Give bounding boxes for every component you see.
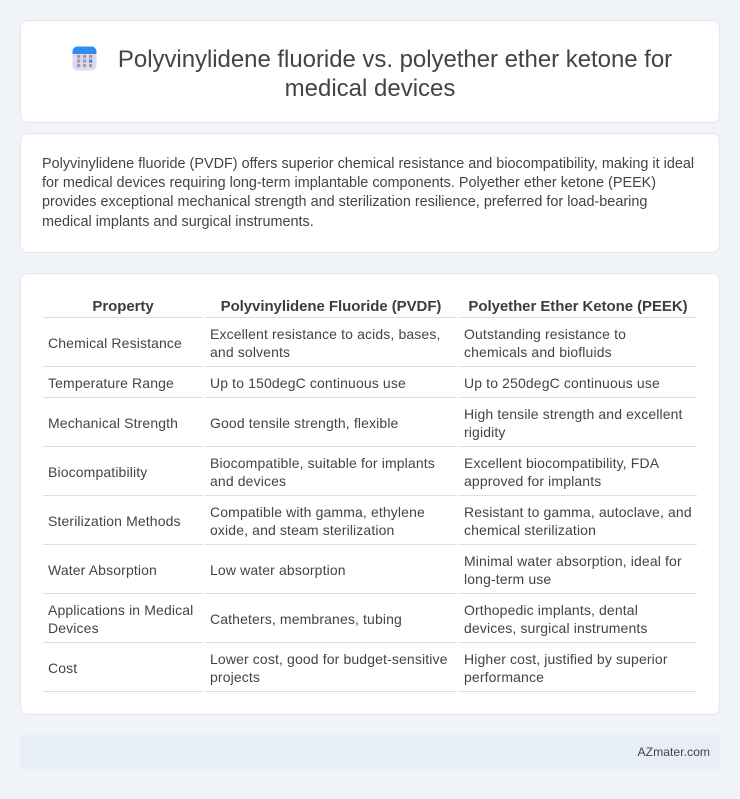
text: oxide, and steam sterilization	[210, 522, 394, 538]
text: Higher cost, justified by superior	[464, 651, 668, 667]
text: Temperature Range	[48, 375, 174, 391]
text: High tensile strength and excellent	[464, 406, 683, 422]
row: sterilization methods	[43, 504, 697, 545]
text: Excellent biocompatibility, FDA	[464, 455, 659, 471]
text: Chemical Resistance	[48, 335, 182, 351]
row: applications	[43, 602, 697, 643]
summary text: Polyvinylidene fluoride (PVDF) offers superior chemical resistance and biocompatibility, making it ideal	[42, 156, 694, 172]
panel: comparison table	[20, 273, 720, 715]
text: Minimal water absorption, ideal for	[464, 553, 682, 569]
row: mechanical strength	[43, 406, 697, 447]
text: Up to 150degC continuous use	[210, 375, 406, 391]
text: Mechanical Strength	[48, 415, 178, 431]
text: Polyvinylidene Fluoride (PVDF)	[221, 298, 441, 315]
text: Resistant to gamma, autoclave, and	[464, 504, 692, 520]
panel: summary	[20, 133, 720, 253]
text: Biocompatible, suitable for implants	[210, 455, 435, 471]
text: approved for implants	[464, 473, 601, 489]
text: Cost	[48, 660, 77, 676]
title: Polyvinylidene fluoride vs. polyether ether ketone for	[118, 46, 672, 73]
text: chemical sterilization	[464, 522, 596, 538]
text: and solvents	[210, 344, 290, 360]
text: Biocompatibility	[48, 464, 147, 480]
text: Property	[92, 298, 154, 315]
text: Orthopedic implants, dental	[464, 602, 638, 618]
text: Applications in Medical	[48, 602, 193, 618]
text: Polyether Ether Ketone (PEEK)	[468, 298, 688, 315]
text: Excellent resistance to acids, bases,	[210, 326, 440, 342]
footer bar	[20, 735, 720, 769]
summary text: medical implants and surgical instruments.	[42, 214, 314, 230]
row: chemical resistance	[43, 326, 697, 367]
summary text	[42, 156, 694, 230]
text: Up to 250degC continuous use	[464, 375, 660, 391]
title	[118, 46, 672, 102]
text: Catheters, membranes, tubing	[210, 611, 402, 627]
text: Low water absorption	[210, 562, 346, 578]
text: performance	[464, 669, 544, 685]
text: long-term use	[464, 571, 551, 587]
text: Compatible with gamma, ethylene	[210, 504, 425, 520]
text: rigidity	[464, 424, 506, 440]
text: Lower cost, good for budget-sensitive	[210, 651, 448, 667]
title: medical devices	[285, 75, 455, 102]
table header	[43, 298, 697, 318]
text: Water Absorption	[48, 562, 157, 578]
icon: calendar	[72, 46, 96, 70]
row: biocompatibility	[43, 455, 697, 496]
panel: title header	[20, 20, 720, 123]
footer credit: AZmater.com	[638, 745, 710, 759]
summary text: for medical devices requiring long-term implantable components. Polyether ether ketone (PEEK)	[42, 175, 656, 191]
text: Good tensile strength, flexible	[210, 415, 398, 431]
text: projects	[210, 669, 260, 685]
row: temperature range	[43, 375, 697, 398]
row: water absorption	[43, 553, 697, 594]
text: and devices	[210, 473, 286, 489]
text: devices, surgical instruments	[464, 620, 648, 636]
row: cost	[43, 651, 697, 692]
text: Outstanding resistance to	[464, 326, 626, 342]
text: Devices	[48, 620, 99, 636]
text: Sterilization Methods	[48, 513, 181, 529]
summary text: provides exceptional mechanical strength and sterilization resilience, preferred for load-bearing	[42, 194, 647, 210]
text: chemicals and biofluids	[464, 344, 612, 360]
